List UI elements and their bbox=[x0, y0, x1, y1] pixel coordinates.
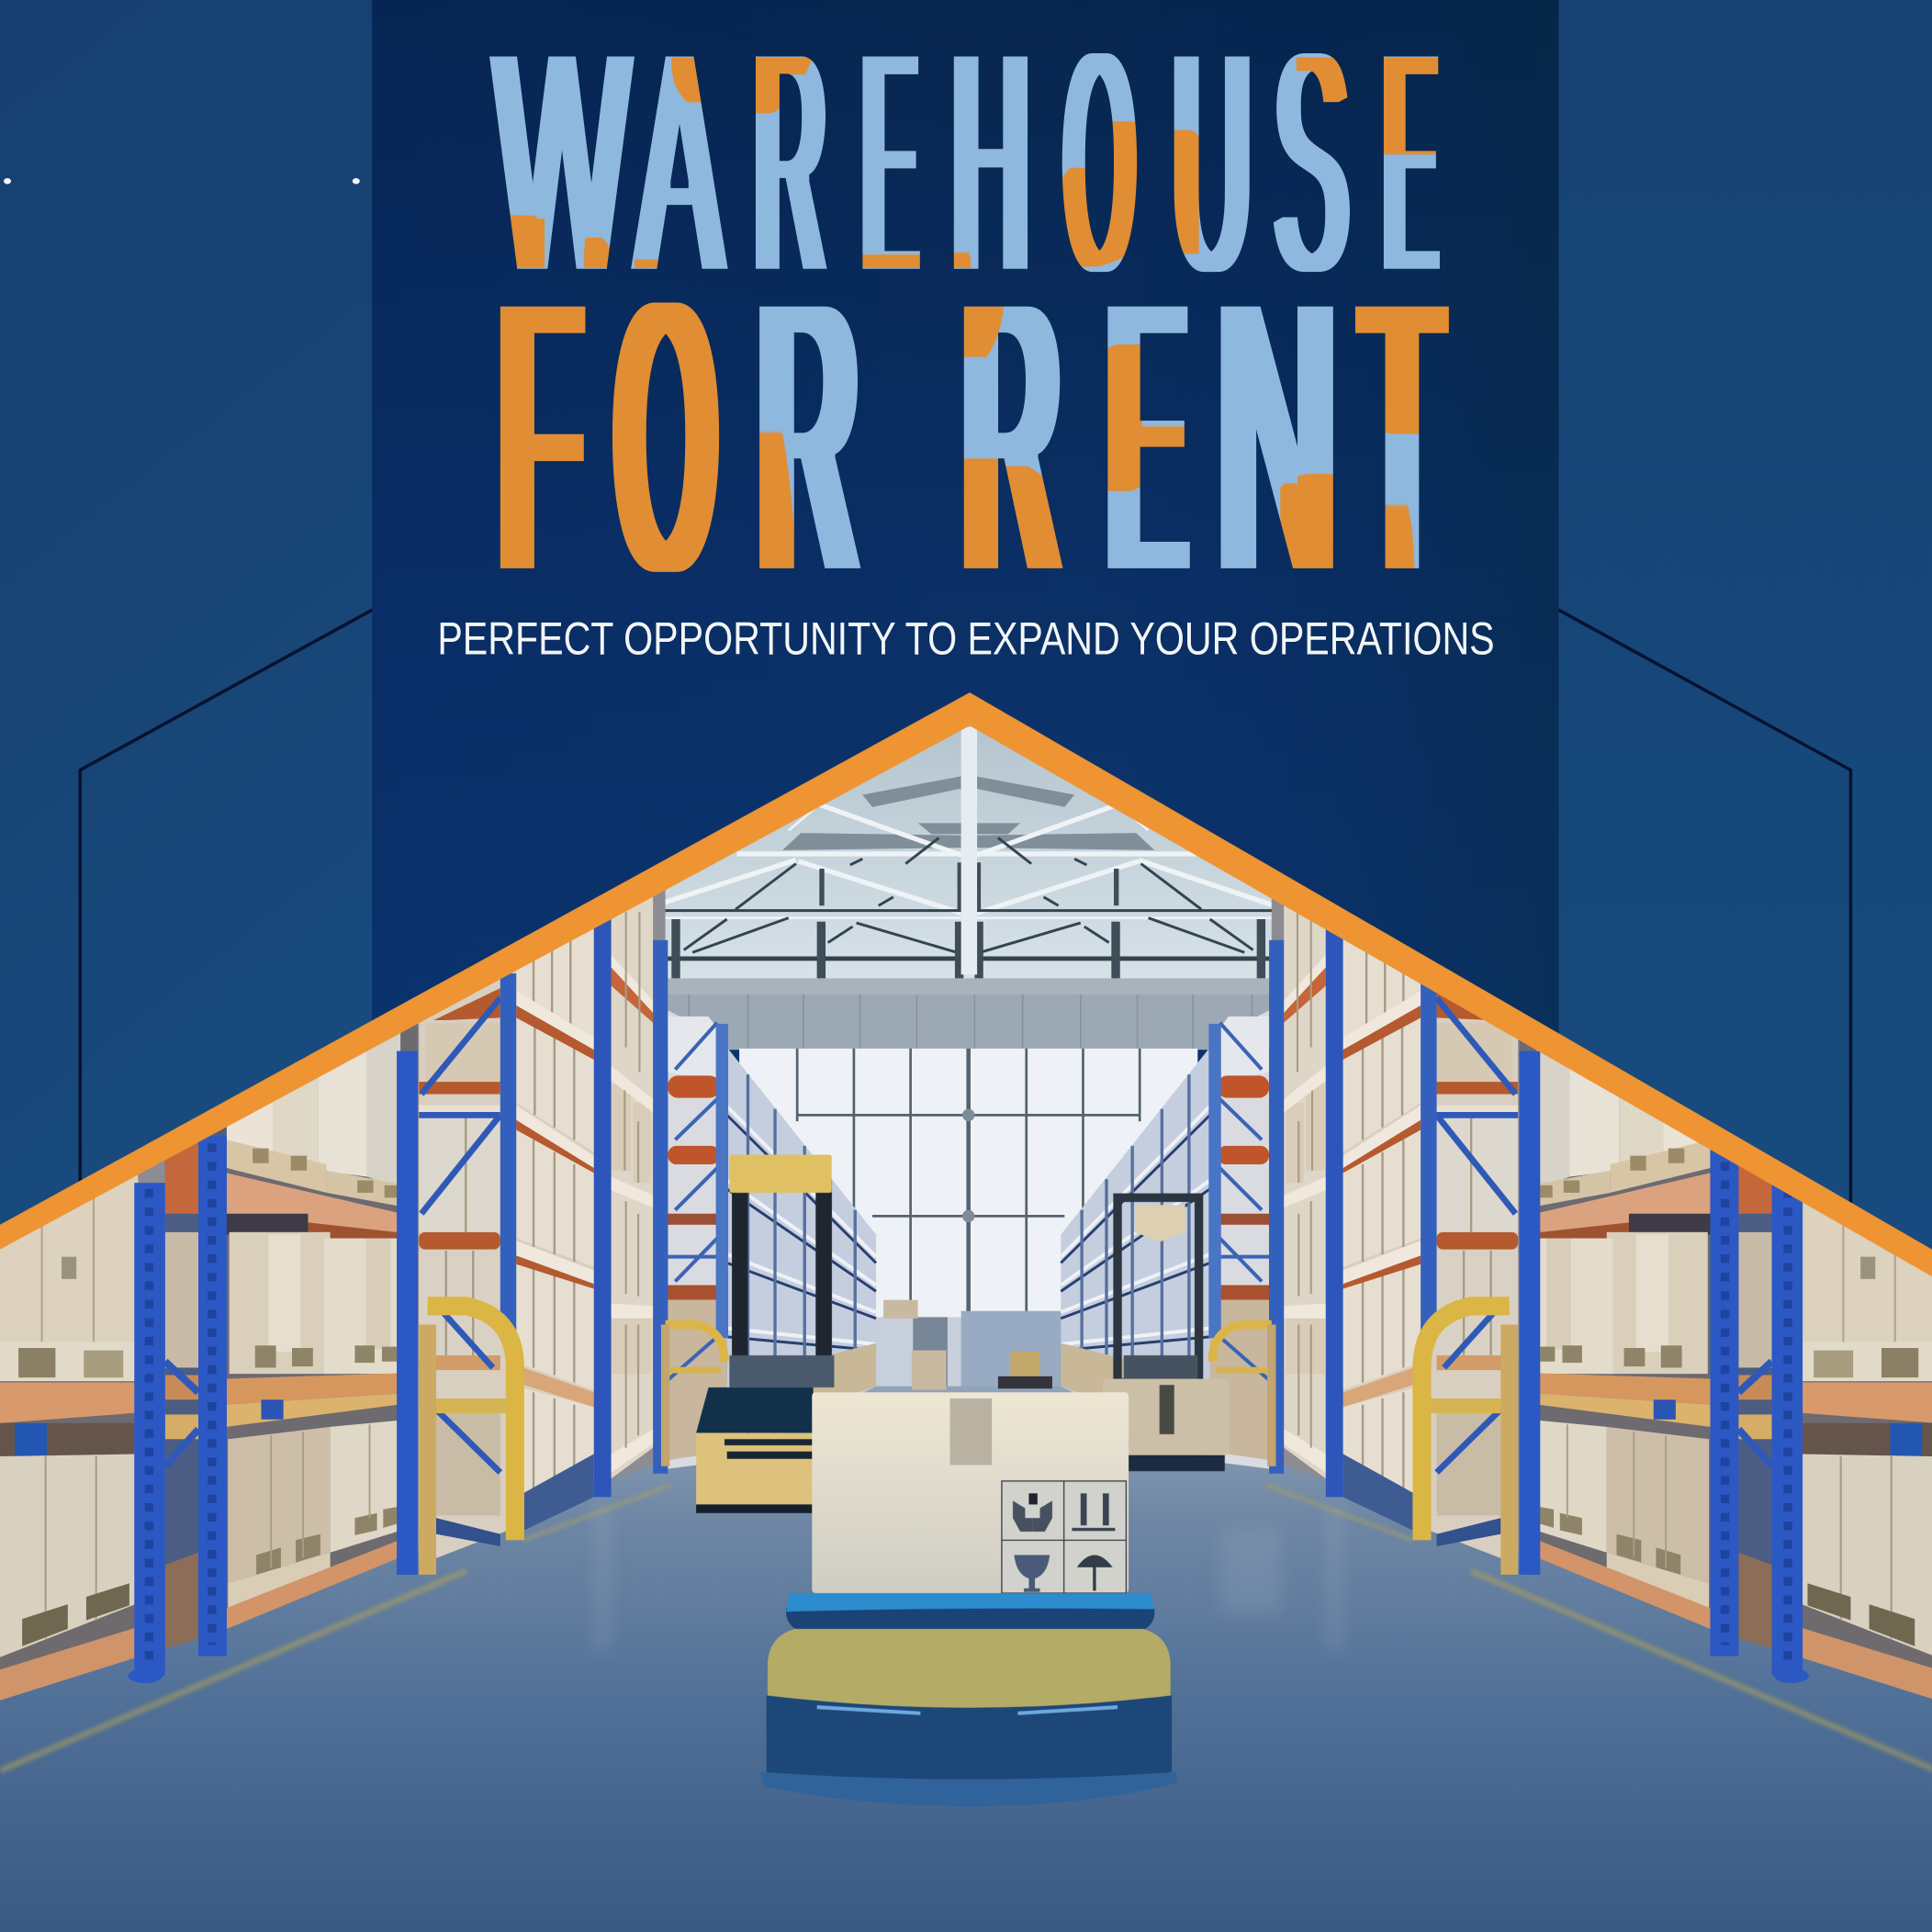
title: for rent: O bbox=[618, 221, 714, 651]
tagline: PERFECT OPPORTUNITY TO EXPAND YOUR OPERATIONS bbox=[437, 613, 1495, 665]
light dots bbox=[4, 178, 360, 184]
rack backdrop bbox=[0, 862, 666, 1701]
robot lift tray bbox=[786, 1593, 1154, 1633]
middle boxes bbox=[230, 1232, 400, 1374]
floor bbox=[0, 1380, 1932, 1932]
panel: left wall bbox=[0, 0, 372, 1932]
panel: central navy column bbox=[372, 0, 1558, 1355]
title: for rent: E bbox=[1109, 221, 1184, 651]
near bay contents bbox=[227, 985, 418, 1629]
right wall outline bbox=[1558, 610, 1850, 1214]
orange roof outline bbox=[0, 692, 1932, 1276]
handling labels bbox=[1002, 1481, 1126, 1593]
right racks bbox=[1061, 862, 1932, 1770]
upright posts near bbox=[129, 1051, 418, 1683]
title: for rent: R bbox=[964, 221, 1059, 651]
floor reflections bbox=[594, 1503, 1343, 1651]
title: for rent: F bbox=[500, 221, 579, 651]
third rack face bbox=[419, 862, 594, 1565]
yellow barrier near bbox=[428, 1306, 515, 1575]
title: for rent: N bbox=[1219, 221, 1335, 651]
title: for rent: R bbox=[759, 221, 857, 651]
left racks bbox=[0, 862, 876, 1770]
icon: this way up bbox=[1072, 1493, 1115, 1531]
beam bbox=[641, 978, 1294, 1050]
far rack bay bbox=[668, 1010, 727, 1468]
warehouse for rent poster: T bbox=[1364, 221, 1441, 651]
robot yellow body bbox=[768, 1629, 1171, 1708]
lower boxes bbox=[228, 1420, 409, 1608]
panel: right wall bbox=[1558, 0, 1932, 1932]
robot base bbox=[760, 1695, 1176, 1806]
yellow floor line bbox=[0, 1485, 671, 1770]
upright posts far bbox=[500, 919, 728, 1497]
left wall outline bbox=[80, 610, 372, 1183]
robot with parcel bbox=[760, 1392, 1176, 1806]
ceiling truss bbox=[641, 722, 1294, 981]
far rack row bbox=[727, 1048, 876, 1461]
leftmost bay behind bbox=[165, 1109, 227, 1648]
yellow barrier far bbox=[666, 1324, 724, 1466]
left forklift bbox=[696, 1154, 834, 1513]
back wall bbox=[875, 1300, 1062, 1390]
icon: handle with care bbox=[1013, 1493, 1052, 1532]
icon: fragile glass bbox=[1014, 1555, 1050, 1592]
warehouse interior scene bbox=[0, 722, 1932, 1932]
icon: keep dry bbox=[1077, 1555, 1113, 1590]
bay between uprights bbox=[612, 862, 653, 1478]
right forklift bbox=[1103, 1197, 1230, 1471]
back window bbox=[739, 1049, 1197, 1322]
top boxes bbox=[227, 1005, 407, 1208]
parcel box bbox=[812, 1392, 1129, 1593]
leftmost rack bbox=[0, 1140, 163, 1701]
